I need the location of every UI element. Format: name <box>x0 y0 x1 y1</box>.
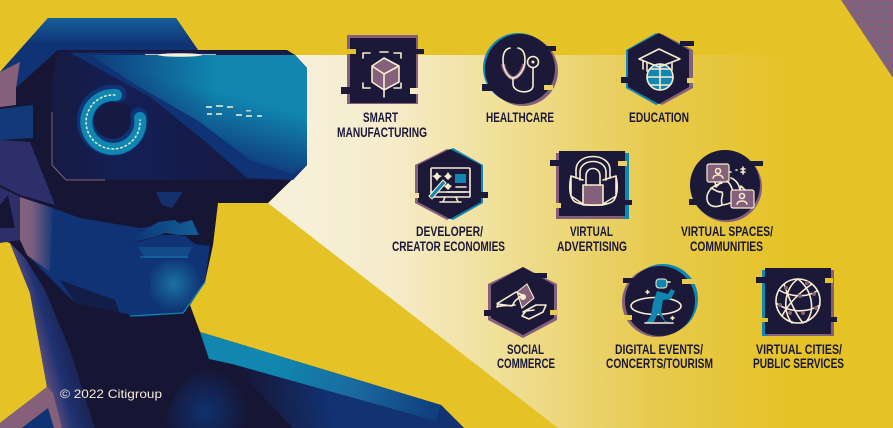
label: digital events concerts tourism: CONCERTS/TOURISM <box>606 356 713 371</box>
label: digital events concerts tourism: DIGITAL EVENTS/ <box>615 342 703 357</box>
icon: virtual spaces / communities <box>689 150 763 222</box>
visor <box>52 51 307 180</box>
icon: social commerce <box>484 267 558 338</box>
label: developer creator economies: CREATOR ECONOMIES <box>392 239 505 254</box>
corner triangle <box>841 0 893 78</box>
head strap <box>0 105 33 140</box>
light beam from headset <box>268 55 893 428</box>
label: social commerce: SOCIAL <box>507 342 544 357</box>
label: developer creator economies <box>392 224 505 254</box>
label: digital events concerts tourism <box>606 342 713 371</box>
icon: education <box>620 33 694 105</box>
helmet side <box>0 62 20 107</box>
label: smart manufacturing <box>337 110 427 140</box>
label: virtual cities public services: PUBLIC SERVICES <box>753 356 844 371</box>
label: virtual spaces communities <box>681 224 773 254</box>
glowing ring <box>85 93 140 149</box>
label: smart manufacturing: MANUFACTURING <box>337 125 427 140</box>
label: virtual cities public services <box>753 342 844 371</box>
label: education: EDUCATION <box>629 110 689 125</box>
copyright: © 2022 Citigroup <box>60 387 162 401</box>
icon: smart manufacturing <box>341 35 424 104</box>
label: virtual spaces communities: VIRTUAL SPACES/ <box>681 224 773 239</box>
nose shadow <box>156 192 183 208</box>
icon: virtual cities <box>756 268 837 336</box>
shoulder blue <box>232 364 464 428</box>
shoulder inner <box>22 408 54 428</box>
icon: healthcare <box>482 33 558 106</box>
figure wearing VR headset <box>0 18 464 428</box>
label: social commerce: COMMERCE <box>497 356 555 371</box>
chest shading <box>165 368 253 428</box>
icon: developer economies <box>409 148 488 220</box>
temple shading <box>0 140 55 205</box>
label: smart manufacturing: SMART <box>363 110 399 125</box>
label: social commerce <box>497 342 555 371</box>
label: virtual advertising: ADVERTISING <box>557 239 627 254</box>
label: virtual advertising <box>557 224 627 254</box>
side shell <box>16 50 58 150</box>
label: virtual cities public services: VIRTUAL CITIES/ <box>756 342 842 357</box>
label: healthcare: HEALTHCARE <box>486 110 554 125</box>
label: virtual spaces communities: COMMUNITIES <box>690 239 763 254</box>
neck edge <box>10 243 95 428</box>
label: developer creator economies: DEVELOPER/ <box>416 224 483 239</box>
visor indicator dots <box>206 105 262 117</box>
helmet top <box>0 18 198 107</box>
icon: virtual advertising <box>550 151 632 219</box>
shoulder highlight <box>200 332 441 421</box>
icon: digital events <box>622 264 698 337</box>
label: virtual advertising: VIRTUAL <box>570 224 613 239</box>
shoulder strap <box>0 387 62 428</box>
face <box>0 187 212 317</box>
